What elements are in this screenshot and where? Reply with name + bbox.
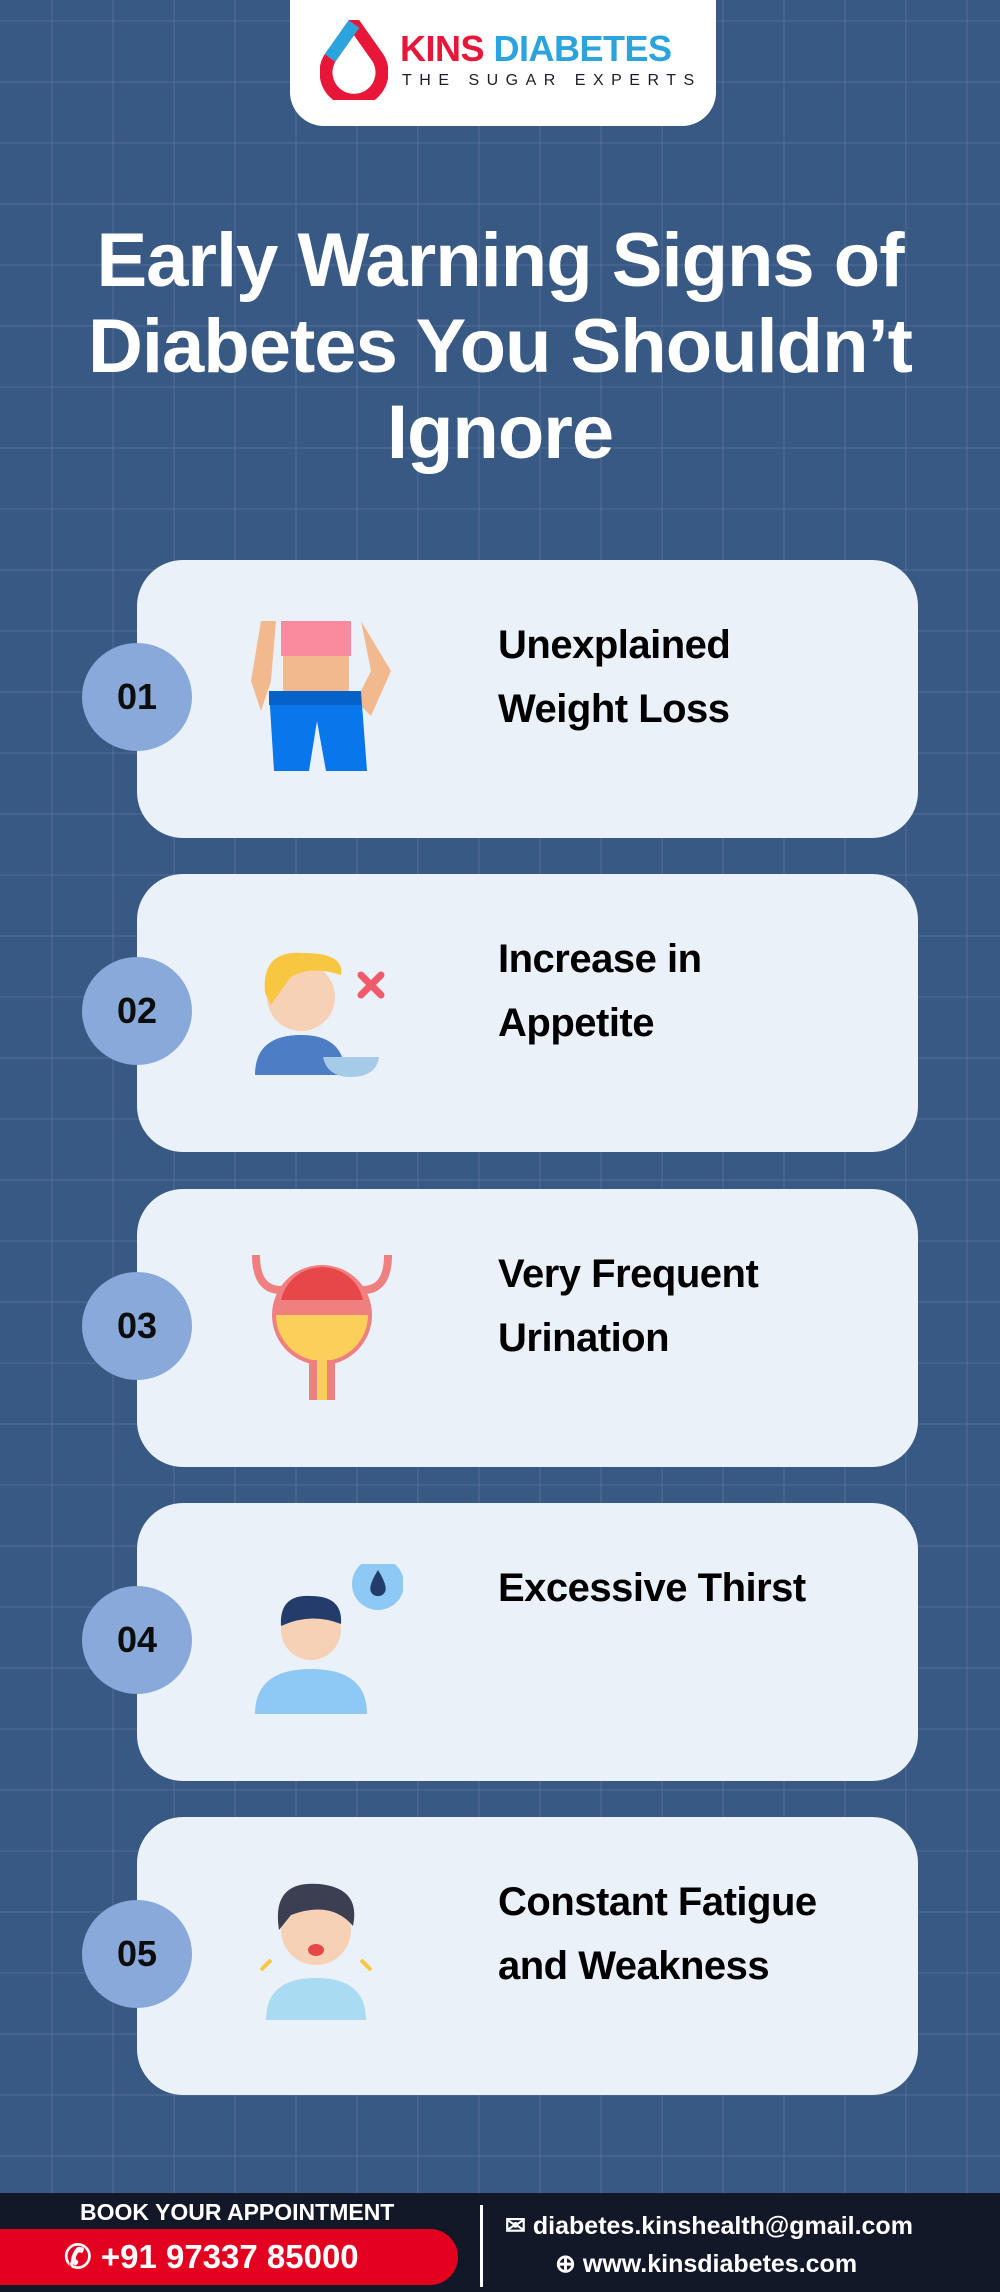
card 4 (137, 1503, 918, 1781)
email: ✉ diabetes.kinshealth@gmail.com (505, 2212, 913, 2240)
card 2 (137, 874, 918, 1152)
title: Diabetes You Shouldn’t (88, 304, 912, 389)
icon: fatigue (260, 1884, 372, 2020)
label: Appetite (498, 1001, 654, 1045)
number 02: 02 (117, 990, 157, 1031)
icon: waist (251, 621, 391, 771)
label: Urination (498, 1316, 669, 1360)
label (498, 623, 730, 731)
tagline: THE SUGAR EXPERTS (402, 72, 702, 89)
title: Early Warning Signs of (96, 218, 904, 303)
label: Very Frequent (498, 1252, 758, 1296)
icon: appetite (255, 952, 384, 1077)
label: Unexplained (498, 623, 730, 667)
number 05: 05 (117, 1933, 157, 1974)
label: Increase in (498, 937, 702, 981)
icon: drop (320, 20, 388, 100)
footer (0, 2193, 1000, 2292)
number 01: 01 (117, 676, 157, 717)
card 5 (137, 1817, 918, 2095)
title: Ignore (387, 390, 613, 475)
card 1 (137, 560, 918, 838)
label (498, 1252, 758, 1360)
logo box (290, 0, 716, 126)
label: Excessive Thirst (498, 1566, 806, 1610)
label: Constant Fatigue (498, 1880, 817, 1924)
number 02 (82, 957, 192, 1065)
number 03: 03 (117, 1305, 157, 1346)
card 3 (137, 1189, 918, 1467)
book label: BOOK YOUR APPOINTMENT (80, 2199, 394, 2225)
number 05 (82, 1900, 192, 2008)
title (88, 218, 912, 475)
label: and Weakness (498, 1944, 769, 1988)
icon: thirst (255, 1564, 403, 1714)
label (498, 937, 702, 1045)
label: Weight Loss (498, 687, 730, 731)
number 04 (82, 1586, 192, 1694)
divider (480, 2205, 483, 2287)
label (498, 1880, 817, 1988)
icon: bladder (252, 1255, 392, 1400)
brand name: KINS DIABETES (400, 28, 672, 69)
phone pill: ✆ +91 97337 85000 (64, 2238, 359, 2275)
number 01 (82, 643, 192, 751)
number 03 (82, 1272, 192, 1380)
number 04: 04 (117, 1619, 157, 1660)
phone pill (0, 2229, 458, 2285)
website: ⊕ www.kinsdiabetes.com (555, 2250, 857, 2278)
